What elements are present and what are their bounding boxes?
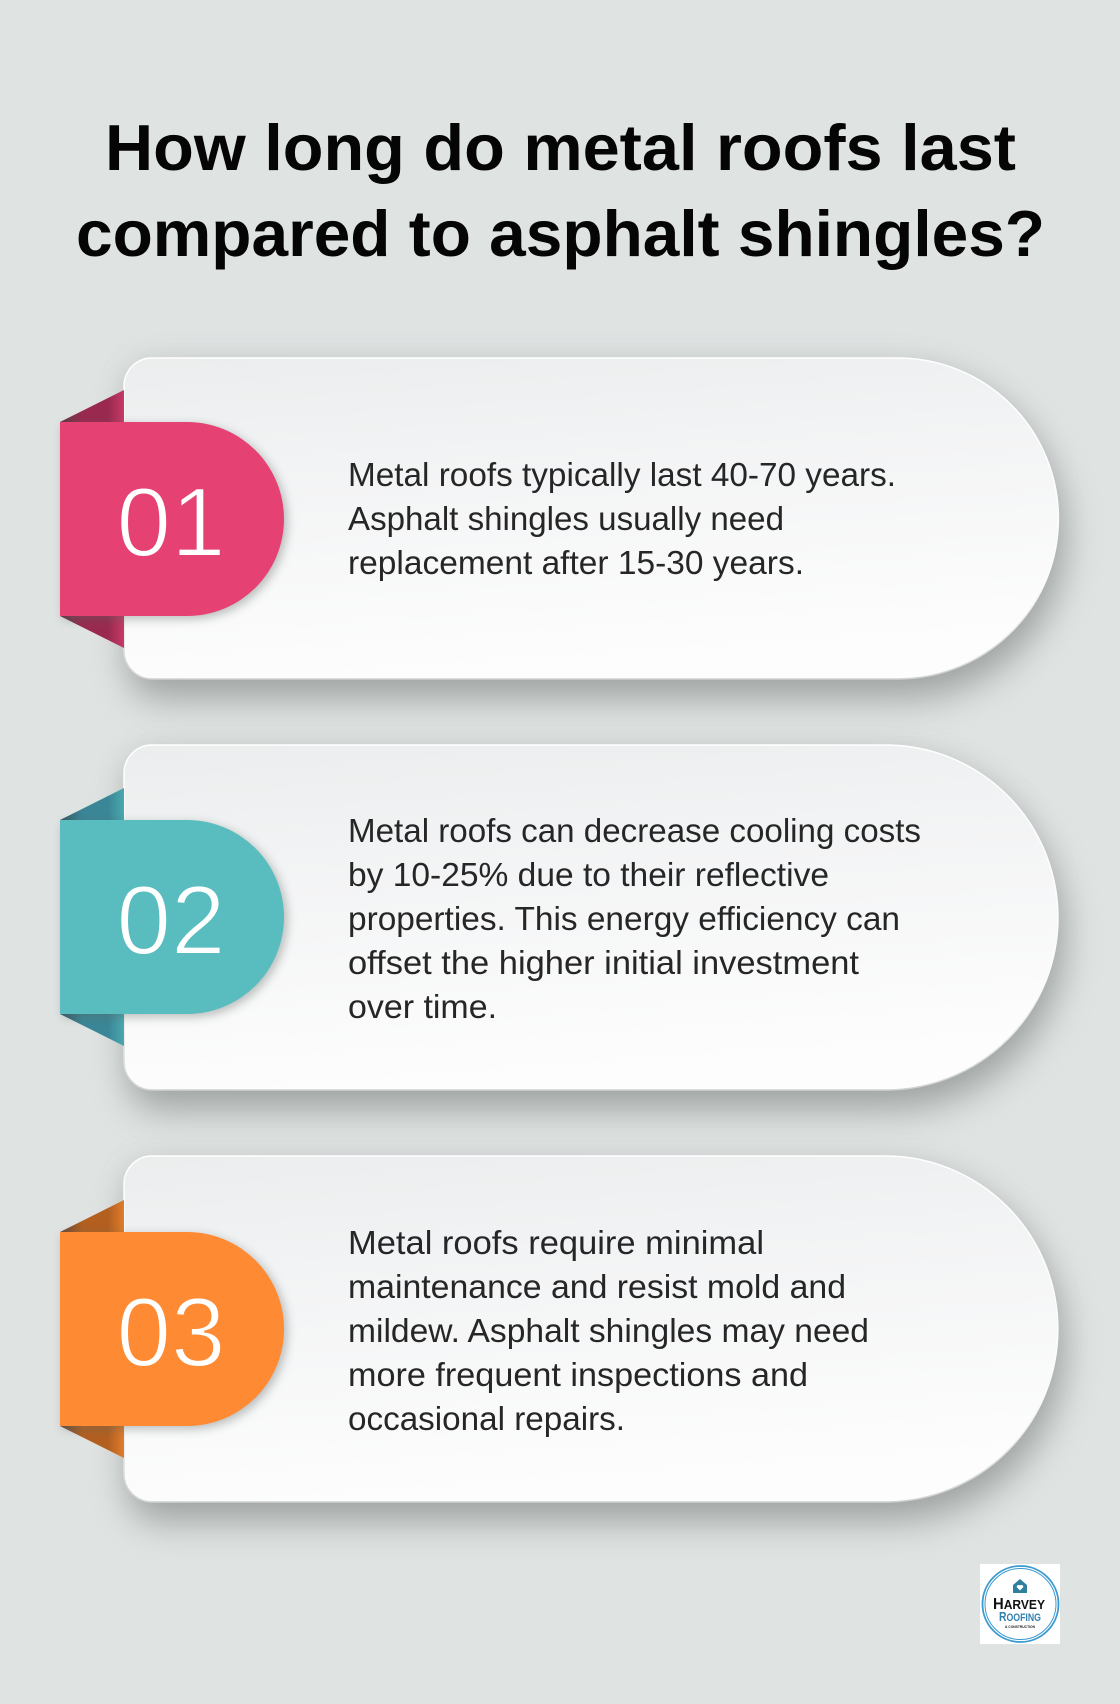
- text: step 2: properties. This energy efficiency can: [348, 900, 900, 937]
- text: step 2: by 10-25% due to their reflective: [348, 856, 829, 893]
- badge: number 02: [60, 820, 284, 1014]
- text: step 1: [348, 456, 896, 581]
- panel: step 3: [60, 1156, 1064, 1522]
- badge: number 02: 02: [116, 865, 226, 975]
- text: step 2: Metal roofs can decrease cooling costs: [348, 812, 921, 849]
- text: step 1: replacement after 15-30 years.: [348, 544, 804, 581]
- text: step 2: offset the higher initial investment: [348, 944, 859, 981]
- card: step 2: [124, 745, 1058, 1090]
- text: step 3: occasional repairs.: [348, 1400, 625, 1437]
- logo: Harvey Roofing: & CONSTRUCTION: [1005, 1624, 1035, 1629]
- title: compared to asphalt shingles?: [76, 197, 1045, 270]
- text: step 1: Asphalt shingles usually need: [348, 500, 784, 537]
- text: step 3: maintenance and resist mold and: [348, 1268, 846, 1305]
- panel: step 2: [60, 745, 1064, 1110]
- text: step 2: [348, 812, 921, 1025]
- logo: Harvey Roofing: HARVEY: [993, 1596, 1045, 1613]
- title: [76, 111, 1045, 270]
- badge: number 01: 01: [116, 467, 226, 577]
- ribbon fold: step 3: [60, 1200, 124, 1458]
- text: step 1: Metal roofs typically last 40-70 years.: [348, 456, 896, 493]
- logo: Harvey Roofing: ROOFING: [999, 1609, 1041, 1624]
- text: step 2: over time.: [348, 988, 497, 1025]
- icon: house with heart: [1013, 1579, 1027, 1593]
- ribbon fold: step 1: [60, 390, 124, 648]
- card: step 1: [124, 358, 1058, 679]
- card: step 3: [124, 1156, 1058, 1502]
- badge: number 01: [60, 422, 284, 616]
- text: step 3: mildew. Asphalt shingles may need: [348, 1312, 869, 1349]
- badge: number 03: 03: [116, 1277, 226, 1387]
- badge: number 03: [60, 1232, 284, 1426]
- text: step 3: [348, 1224, 869, 1437]
- logo: Harvey Roofing: [980, 1564, 1060, 1644]
- text: step 3: more frequent inspections and: [348, 1356, 808, 1393]
- text: step 3: Metal roofs require minimal: [348, 1224, 764, 1261]
- panel: step 1: [60, 358, 1064, 699]
- title: How long do metal roofs last: [105, 111, 1016, 184]
- ribbon fold: step 2: [60, 788, 124, 1046]
